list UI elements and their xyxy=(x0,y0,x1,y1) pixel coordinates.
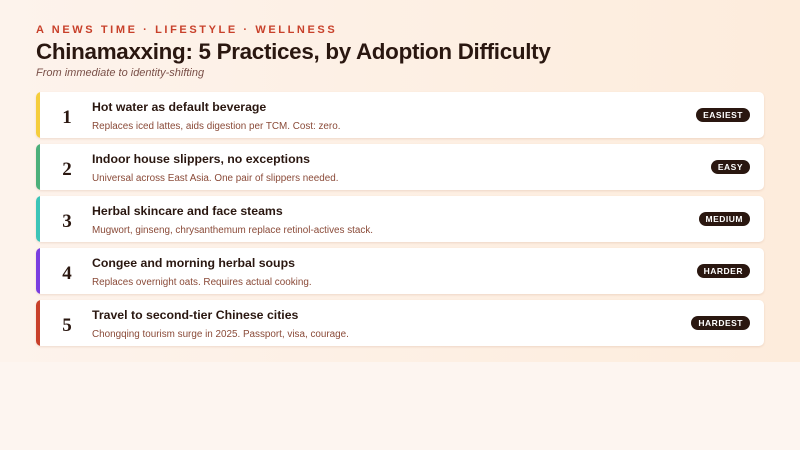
kicker: A NEWS TIME · LIFESTYLE · WELLNESS xyxy=(36,24,337,36)
row 4: Replaces overnight oats. Requires actual cooking. xyxy=(92,277,312,288)
row 5: 5 xyxy=(62,315,72,336)
row 2: 2 xyxy=(62,159,72,180)
row 5: Travel to second-tier Chinese cities xyxy=(92,308,298,322)
row 3: Mugwort, ginseng, chrysanthemum replace retinol-actives stack. xyxy=(92,225,373,236)
subtitle: From immediate to identity-shifting xyxy=(36,67,204,79)
row 1: Replaces iced lattes, aids digestion per TCM. Cost: zero. xyxy=(92,121,340,132)
row 1: 1 xyxy=(62,107,72,128)
row 5 xyxy=(36,300,764,346)
row 2: Indoor house slippers, no exceptions xyxy=(92,152,310,166)
row 4: 4 xyxy=(62,263,72,284)
row 3: MEDIUM xyxy=(706,214,743,224)
row 1 xyxy=(36,92,764,138)
row 2 xyxy=(36,144,764,190)
row 3 xyxy=(36,196,764,242)
row 3: 3 xyxy=(62,211,72,232)
row 4: HARDER xyxy=(704,266,743,276)
row 4 xyxy=(36,248,764,294)
row 1: EASIEST xyxy=(703,110,743,120)
row 3: Herbal skincare and face steams xyxy=(92,204,283,218)
row 2: Universal across East Asia. One pair of slippers needed. xyxy=(92,173,338,184)
row 5: HARDEST xyxy=(698,318,743,328)
title: Chinamaxxing: 5 Practices, by Adoption Difficulty xyxy=(36,39,550,64)
row 2: EASY xyxy=(718,162,743,172)
row 4: Congee and morning herbal soups xyxy=(92,256,295,270)
row 5: Chongqing tourism surge in 2025. Passport, visa, courage. xyxy=(92,329,349,340)
row 1: Hot water as default beverage xyxy=(92,100,266,114)
